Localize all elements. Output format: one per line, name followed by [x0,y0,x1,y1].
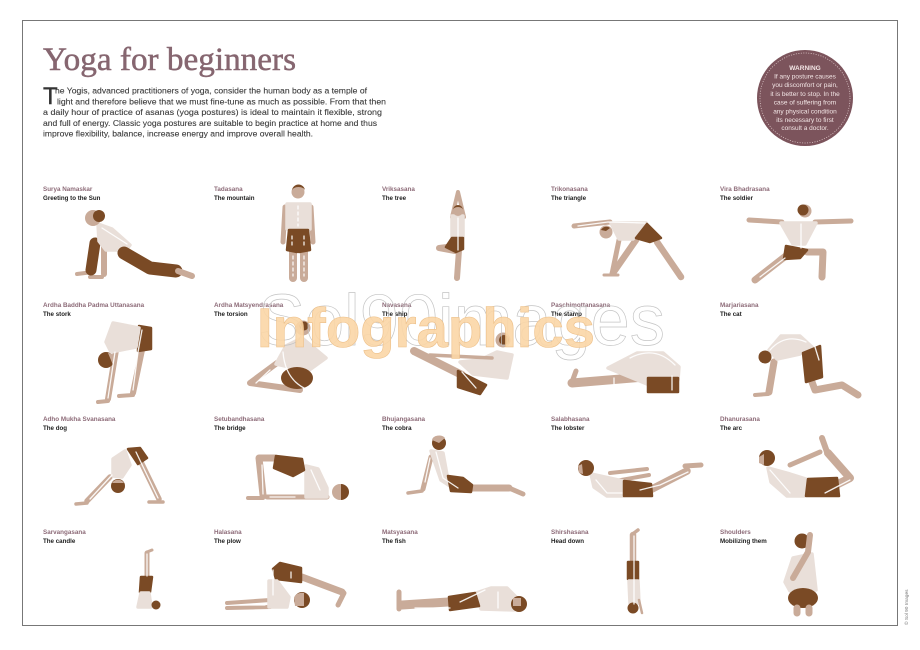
pose: Setubandhasana: Setubandhasana [214,416,265,423]
pose: Shoulders: Mobilizing them [720,538,767,545]
pose: Trikonasana [551,186,681,277]
pose: Vriksasana [382,186,464,278]
warning badge: its necessary to first [776,117,834,124]
pose: Sarvangasana: The candle [43,538,76,545]
pose: Dhanurasana [720,416,850,496]
pose: Tadasana [214,185,313,278]
pose: Paschimottanasana: The stamp [551,311,582,318]
pose: Tadasana: The mountain [214,195,255,202]
pose: Ardha Baddha Padma Uttanasana [43,302,151,402]
pose: Navasana: The ship [382,311,408,318]
pose: Salabhasana [551,416,701,496]
pose: Matsyasana: Matsyasana [382,529,418,536]
pose: Adho Mukha Svanasana: The dog [43,425,67,432]
pose: Bhujangasana: The cobra [382,425,412,432]
pose: Ardha Matsyendrasana: Ardha Matsyendrasana [214,302,284,309]
pose: Surya Namaskar [43,186,192,277]
title: Yoga for beginners [43,42,296,78]
watermark: Infographics: Infographics [257,296,595,359]
pose: Shirshasana [551,529,642,614]
warning badge: case of suffering from [774,100,836,106]
pose: Shirshasana: Shirshasana [551,529,589,536]
pose: Shirshasana: Head down [551,538,584,545]
pose: Ardha Matsyendrasana [214,302,326,390]
intro paragraph [43,83,386,138]
pose: Bhujangasana: Bhujangasana [382,416,426,423]
warning badge: consult a doctor. [781,125,829,132]
warning badge: you discomfort or pain, [772,82,838,89]
pose: Ardha Baddha Padma Uttanasana: The stork [43,311,71,318]
pose: Paschimottanasana: Paschimottanasana [551,302,611,309]
pose: Ardha Baddha Padma Uttanasana: Ardha Baddha Padma Uttanasana [43,302,145,309]
pose: Adho Mukha Svanasana: Adho Mukha Svanasana [43,416,116,423]
pose: Dhanurasana: The arc [720,425,743,432]
pose: Marjariasana: Marjariasana [720,302,759,309]
pose: Halasana: The plow [214,538,241,545]
intro paragraph: light and therefore believe that we must fine-tune as much as possible. From that then [57,96,386,106]
pose: Tadasana: Tadasana [214,186,243,193]
warning badge: If any posture causes [774,74,837,80]
pose: Surya Namaskar: Greeting to the Sun [43,195,101,202]
pose: Halasana: Halasana [214,529,242,536]
pose: Shoulders [720,529,818,613]
pose: Sarvangasana: Sarvangasana [43,529,86,536]
pose: Paschimottanasana [551,302,679,392]
intro paragraph: and full of energy. Classic yoga postures are suitable to begin practice at home and thus [43,118,377,128]
pose: Setubandhasana: The bridge [214,425,246,432]
pose: Salabhasana: The lobster [551,425,585,432]
pose: Salabhasana: Salabhasana [551,416,590,423]
intro paragraph: a daily hour of practice of asanas (yoga postures) is ideal to maintain it flexible, strong [43,107,382,117]
pose: Adho Mukha Svanasana [43,416,163,504]
pose: Navasana [382,302,512,394]
pose: Marjariasana: The cat [720,311,742,318]
pose: Vriksasana: The tree [382,195,407,202]
warning badge: any physical condition [773,108,837,116]
pose: Marjariasana [720,302,858,395]
warning badge: it is better to stop. In the [770,91,840,98]
pose: Vriksasana: Vriksasana [382,186,415,193]
pose: Dhanurasana: Dhanurasana [720,416,760,423]
copyright: © Sol 90 Images [903,589,910,625]
pose: Bhujangasana [382,416,523,494]
pose: Setubandhasana [214,416,349,500]
pose: Vira Bhadrasana: Vira Bhadrasana [720,186,770,193]
pose: Sarvangasana [43,529,160,610]
pose: Surya Namaskar: Surya Namaskar [43,186,93,193]
intro paragraph: improve flexibility, balance, increase energy and improve overall health. [43,128,313,138]
pose: Trikonasana: The triangle [551,195,587,202]
pose: Trikonasana: Trikonasana [551,186,588,193]
pose: Shoulders: Shoulders [720,529,751,536]
pose: Halasana [214,529,344,608]
pose: Matsyasana [382,529,527,612]
intro paragraph: T [43,83,58,110]
pose: Vira Bhadrasana: The soldier [720,195,754,202]
watermark: Sol90images: Sol90images [258,281,665,361]
pose: Navasana: Navasana [382,302,412,309]
warning badge [757,50,853,146]
pose: Vira Bhadrasana [720,186,851,280]
pose: Ardha Matsyendrasana: The torsion [214,311,248,318]
intro paragraph: he Yogis, advanced practitioners of yoga, consider the human body as a temple of [55,86,368,96]
warning badge: WARNING [789,65,821,72]
pose: Matsyasana: The fish [382,538,406,545]
